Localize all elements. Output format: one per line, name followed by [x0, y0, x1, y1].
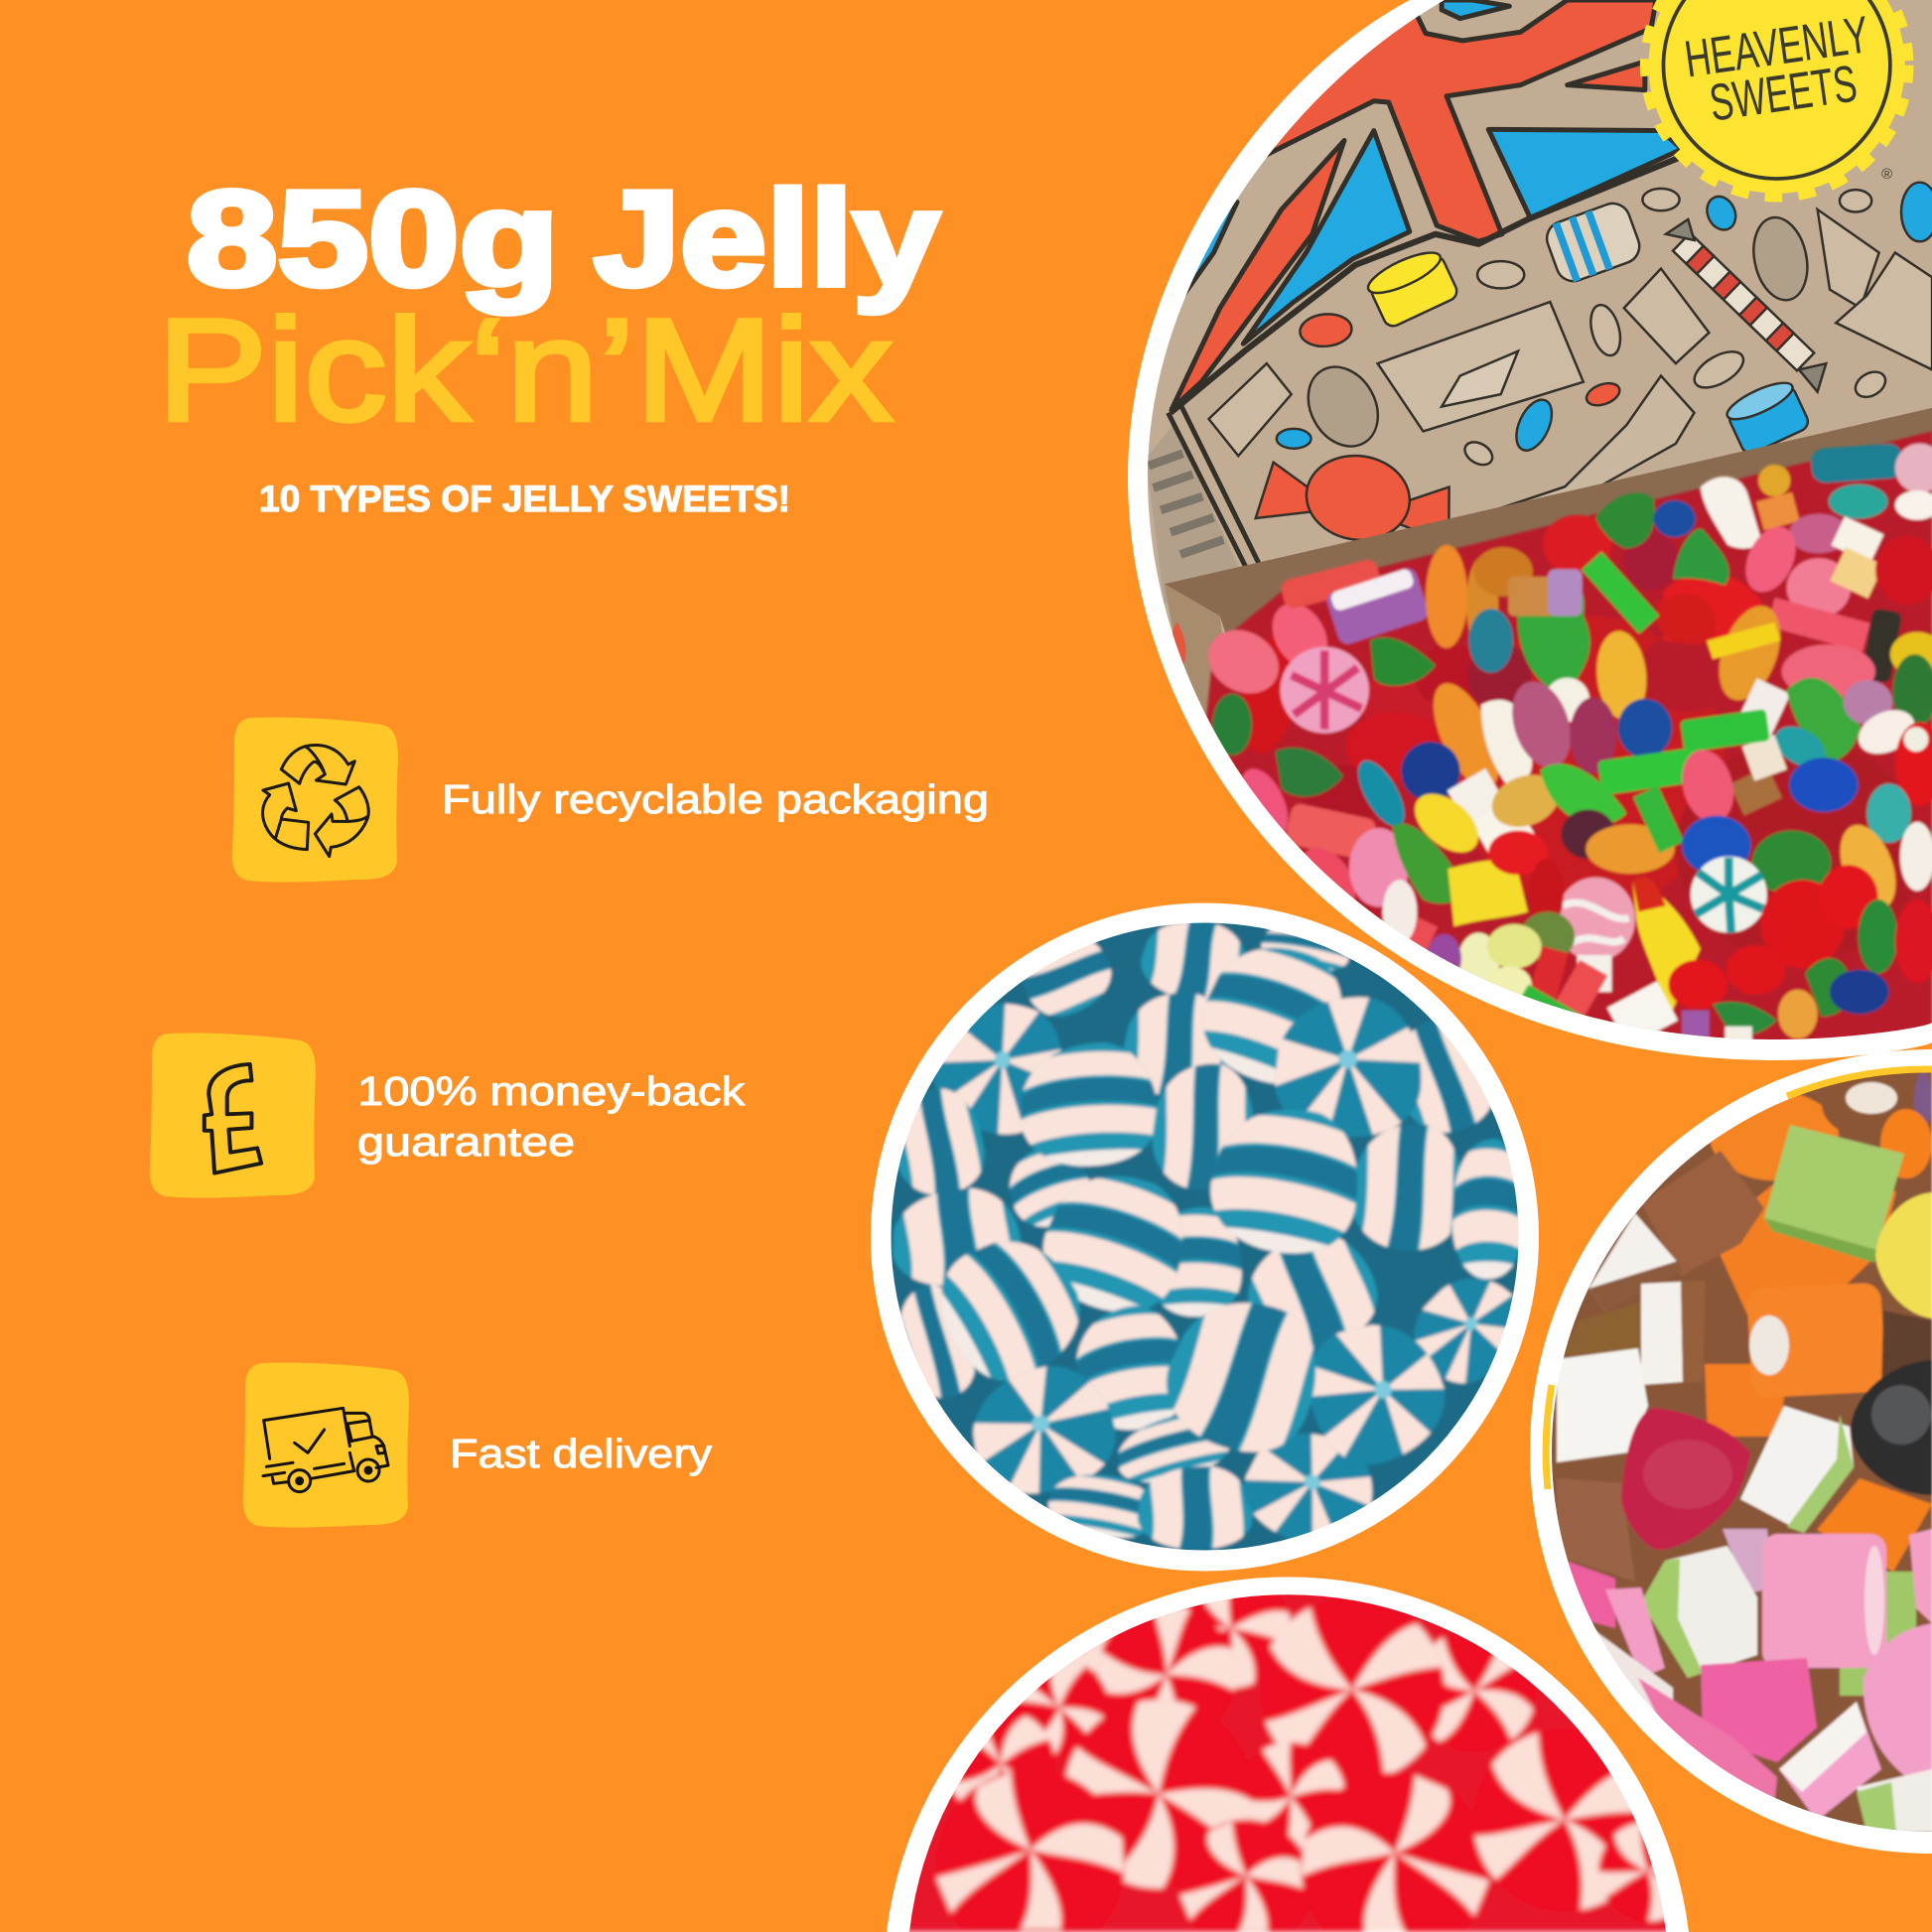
- label: recyclable: Fully recyclable packaging: [442, 776, 989, 822]
- subtitle: 10 TYPES OF JELLY SWEETS!: [259, 479, 790, 519]
- label: money-back: guarantee: [357, 1119, 575, 1165]
- photo: dolly mixture sweets: [1530, 1049, 1932, 1854]
- title: 850g Jelly: 850g: [187, 163, 559, 314]
- logo badge: Heavenly Sweets: ®: [1881, 167, 1892, 183]
- photo: gift box with jelly sweets: [1109, 0, 1932, 1072]
- box inside wall: [1165, 408, 1932, 653]
- feature: recyclable packaging: [232, 718, 989, 883]
- logo badge: Heavenly Sweets: [1646, 0, 1907, 196]
- icon: recycle: [232, 718, 398, 883]
- jelly sweets pile: [1196, 431, 1932, 1072]
- label: fast delivery: Fast delivery: [450, 1431, 713, 1476]
- title: Pick'n'Mix: Pick‘n’Mix: [157, 289, 893, 451]
- yellow edge slivers: [1546, 1069, 1932, 1489]
- box corner stripes: [1146, 404, 1259, 604]
- icon: delivery truck: [243, 1363, 409, 1528]
- logo badge: Heavenly Sweets: SWEETS: [1706, 55, 1861, 133]
- icon: pound: [150, 1034, 316, 1198]
- photo: red and white jelly sweets: [887, 1547, 1698, 1932]
- union jack illustration: [1171, 0, 1688, 413]
- label: money-back: 100% money-back: [357, 1068, 746, 1114]
- feature: money-back guarantee: [150, 1034, 746, 1198]
- title: 850g Jelly: Jelly: [594, 163, 939, 314]
- illustrated sweets on lid: [1209, 183, 1932, 553]
- feature: fast delivery: [243, 1363, 713, 1528]
- photo: blue and white jelly sweets: [871, 903, 1539, 1571]
